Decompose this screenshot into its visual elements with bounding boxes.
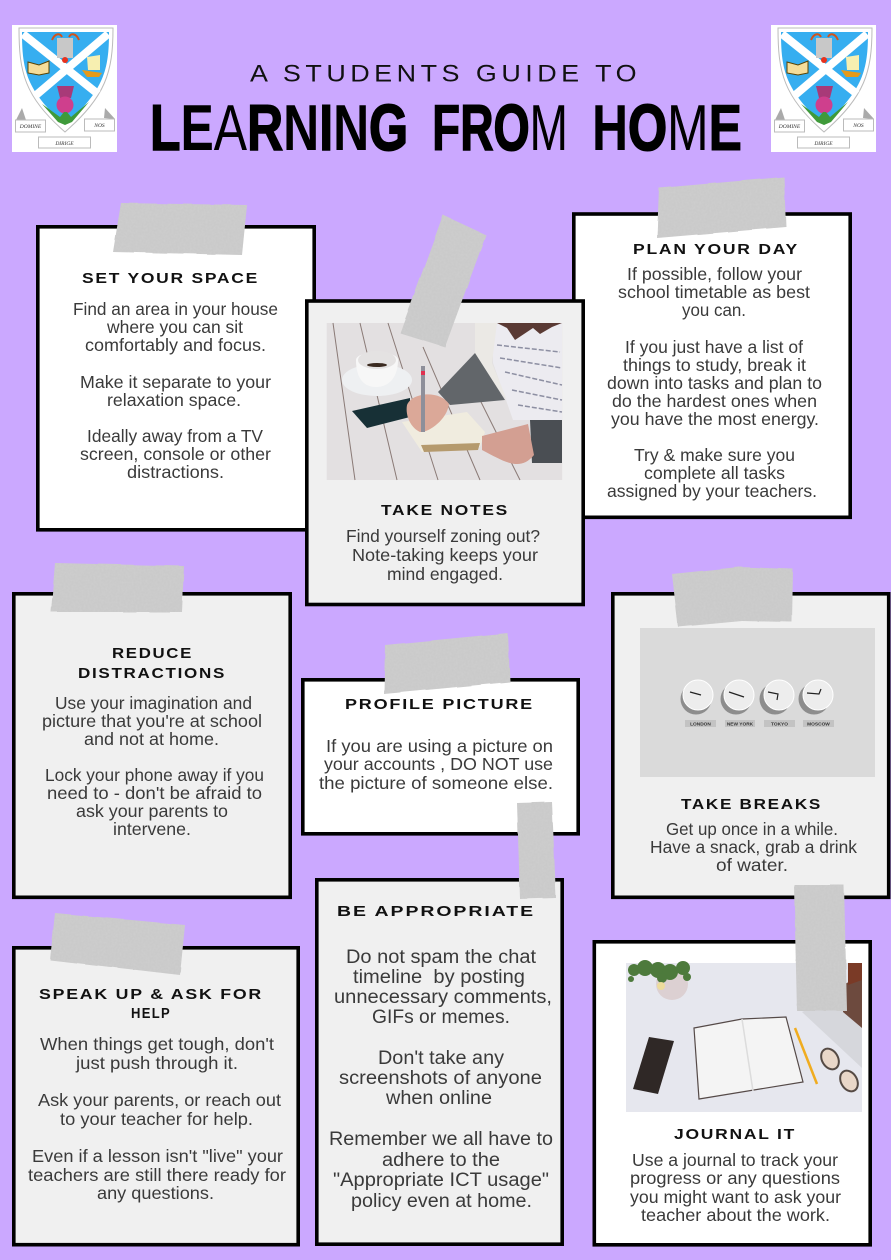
panel: be appropriate: BE APPROPRIATE — [337, 903, 535, 920]
panel: set your space: Find an area in your house — [73, 299, 278, 319]
panel: be appropriate: timeline by posting — [353, 967, 525, 988]
photo: world clocks — [640, 628, 875, 777]
panel: reduce distractions: Use your imagination and — [55, 693, 252, 713]
panel: set your space: where you can sit — [106, 317, 243, 337]
panel: profile picture: the picture of someone else. — [319, 773, 553, 793]
panel: speak up and ask for help: just push through it. — [75, 1053, 238, 1073]
photo: world clocks: TOKYO — [771, 722, 788, 728]
title — [150, 91, 742, 164]
panel: reduce distractions: need to - don't be afraid to — [47, 783, 262, 803]
panel: reduce distractions — [14, 563, 290, 897]
panel: take notes: Find yourself zoning out? — [346, 526, 540, 546]
panel: be appropriate — [317, 802, 562, 1244]
panel: be appropriate: Don't take any — [378, 1048, 505, 1069]
panel: journal it: JOURNAL IT — [674, 1126, 796, 1143]
title: LEARNING — [150, 91, 408, 164]
panel: reduce distractions: and not at home. — [84, 729, 219, 749]
panel: reduce distractions: ask your parents to — [76, 801, 228, 821]
panel: profile picture: your accounts , DO NOT use — [324, 754, 553, 774]
title: FROM — [432, 91, 568, 164]
panel: plan your day — [574, 177, 850, 517]
title: HOME — [592, 91, 742, 164]
panel: be appropriate: when online — [385, 1088, 492, 1109]
panel: take notes: TAKE NOTES — [381, 502, 509, 519]
panel: take breaks: of water. — [716, 855, 788, 875]
panel: plan your day: Try & make sure you — [634, 445, 795, 465]
panel: plan your day: you can. — [682, 300, 746, 320]
panel: plan your day: assigned by your teachers. — [607, 481, 817, 501]
panel: journal it — [594, 885, 870, 1245]
panel: reduce distractions: Lock your phone away if you — [45, 765, 264, 785]
panel: journal it: progress or any questions — [630, 1168, 840, 1188]
photo: world clocks: NEW YORK — [727, 722, 754, 728]
panel: speak up and ask for help: Ask your parents, or reach out — [38, 1090, 281, 1110]
panel: reduce distractions: intervene. — [113, 819, 191, 839]
panel: be appropriate: policy even at home. — [351, 1191, 532, 1212]
panel: plan your day: do the hardest ones when — [612, 391, 817, 411]
panel: reduce distractions: REDUCE — [112, 645, 193, 662]
photo: world clocks: LONDON — [690, 722, 711, 728]
panel: plan your day: PLAN YOUR DAY — [633, 241, 799, 258]
panel: take notes: Note-taking keeps your — [352, 545, 538, 565]
panel: journal it: teacher about the work. — [641, 1205, 830, 1225]
panel: be appropriate: adhere to the — [382, 1150, 500, 1171]
panel: set your space: comfortably and focus. — [85, 335, 266, 355]
panel: speak up and ask for help: HELP — [131, 1005, 171, 1022]
panel: plan your day: down into tasks and plan to — [607, 373, 822, 393]
panel: journal it: Use a journal to track your — [632, 1150, 838, 1170]
photo: open journal on desk — [626, 960, 862, 1112]
panel: set your space: screen, console or other — [80, 444, 271, 464]
panel: take breaks: TAKE BREAKS — [681, 796, 822, 813]
panel: speak up and ask for help: any questions. — [97, 1183, 214, 1203]
photo: writing in a notebook — [327, 323, 562, 480]
panel: be appropriate: GIFs or memes. — [372, 1007, 510, 1028]
panel: take notes: mind engaged. — [387, 564, 503, 584]
panel: take notes — [307, 215, 583, 604]
panel: profile picture: If you are using a picture on — [326, 736, 553, 756]
panel: set your space — [38, 203, 314, 530]
panel: be appropriate: unnecessary comments, — [334, 987, 552, 1008]
school crest left: DOMINE — [19, 124, 42, 130]
panel: be appropriate: Remember we all have to — [329, 1129, 553, 1150]
school crest right: NOS — [852, 123, 864, 129]
school crest left — [12, 25, 117, 152]
panel: be appropriate: Do not spam the chat — [346, 947, 537, 968]
panel: speak up and ask for help — [14, 913, 298, 1245]
panel: speak up and ask for help: SPEAK UP & ASK FOR — [39, 986, 263, 1003]
panel: speak up and ask for help: to your teacher for help. — [60, 1109, 253, 1129]
panel: profile picture — [303, 633, 578, 834]
subtitle: A STUDENTS GUIDE TO — [250, 60, 641, 88]
photo: world clocks: MOSCOW — [807, 722, 830, 728]
school crest left: DIRIGE — [54, 141, 74, 147]
panel: plan your day: If possible, follow your — [627, 264, 802, 284]
panel: set your space: relaxation space. — [107, 390, 241, 410]
panel: speak up and ask for help: When things get tough, don't — [40, 1034, 274, 1054]
panel: speak up and ask for help: teachers are still there ready for — [28, 1165, 286, 1185]
panel: take breaks: Have a snack, grab a drink — [650, 837, 857, 857]
school crest right: DOMINE — [778, 124, 801, 130]
panel: set your space: Make it separate to your — [80, 372, 271, 392]
school crest right — [771, 25, 876, 152]
panel: plan your day: school timetable as best — [618, 282, 810, 302]
panel: plan your day: If you just have a list of — [625, 337, 803, 357]
panel: set your space: distractions. — [127, 462, 224, 482]
panel: reduce distractions: picture that you're at school — [42, 711, 262, 731]
panel: take breaks — [613, 567, 889, 897]
panel: plan your day: complete all tasks — [644, 463, 785, 483]
school crest right: DIRIGE — [813, 141, 833, 147]
panel: reduce distractions: DISTRACTIONS — [78, 665, 226, 682]
panel: speak up and ask for help: Even if a lesson isn't "live" your — [32, 1146, 283, 1166]
panel: journal it: you might want to ask your — [630, 1187, 841, 1207]
panel: profile picture: PROFILE PICTURE — [345, 696, 534, 713]
panel: set your space: SET YOUR SPACE — [82, 270, 259, 287]
panel: be appropriate: screenshots of anyone — [339, 1068, 542, 1089]
panel: set your space: Ideally away from a TV — [87, 426, 263, 446]
panel: be appropriate: "Appropriate ICT usage" — [333, 1170, 549, 1191]
panel: plan your day: you have the most energy. — [611, 409, 819, 429]
panel: take breaks: Get up once in a while. — [666, 819, 838, 839]
panel: plan your day: things to study, break it — [623, 355, 806, 375]
school crest left: NOS — [93, 123, 105, 129]
